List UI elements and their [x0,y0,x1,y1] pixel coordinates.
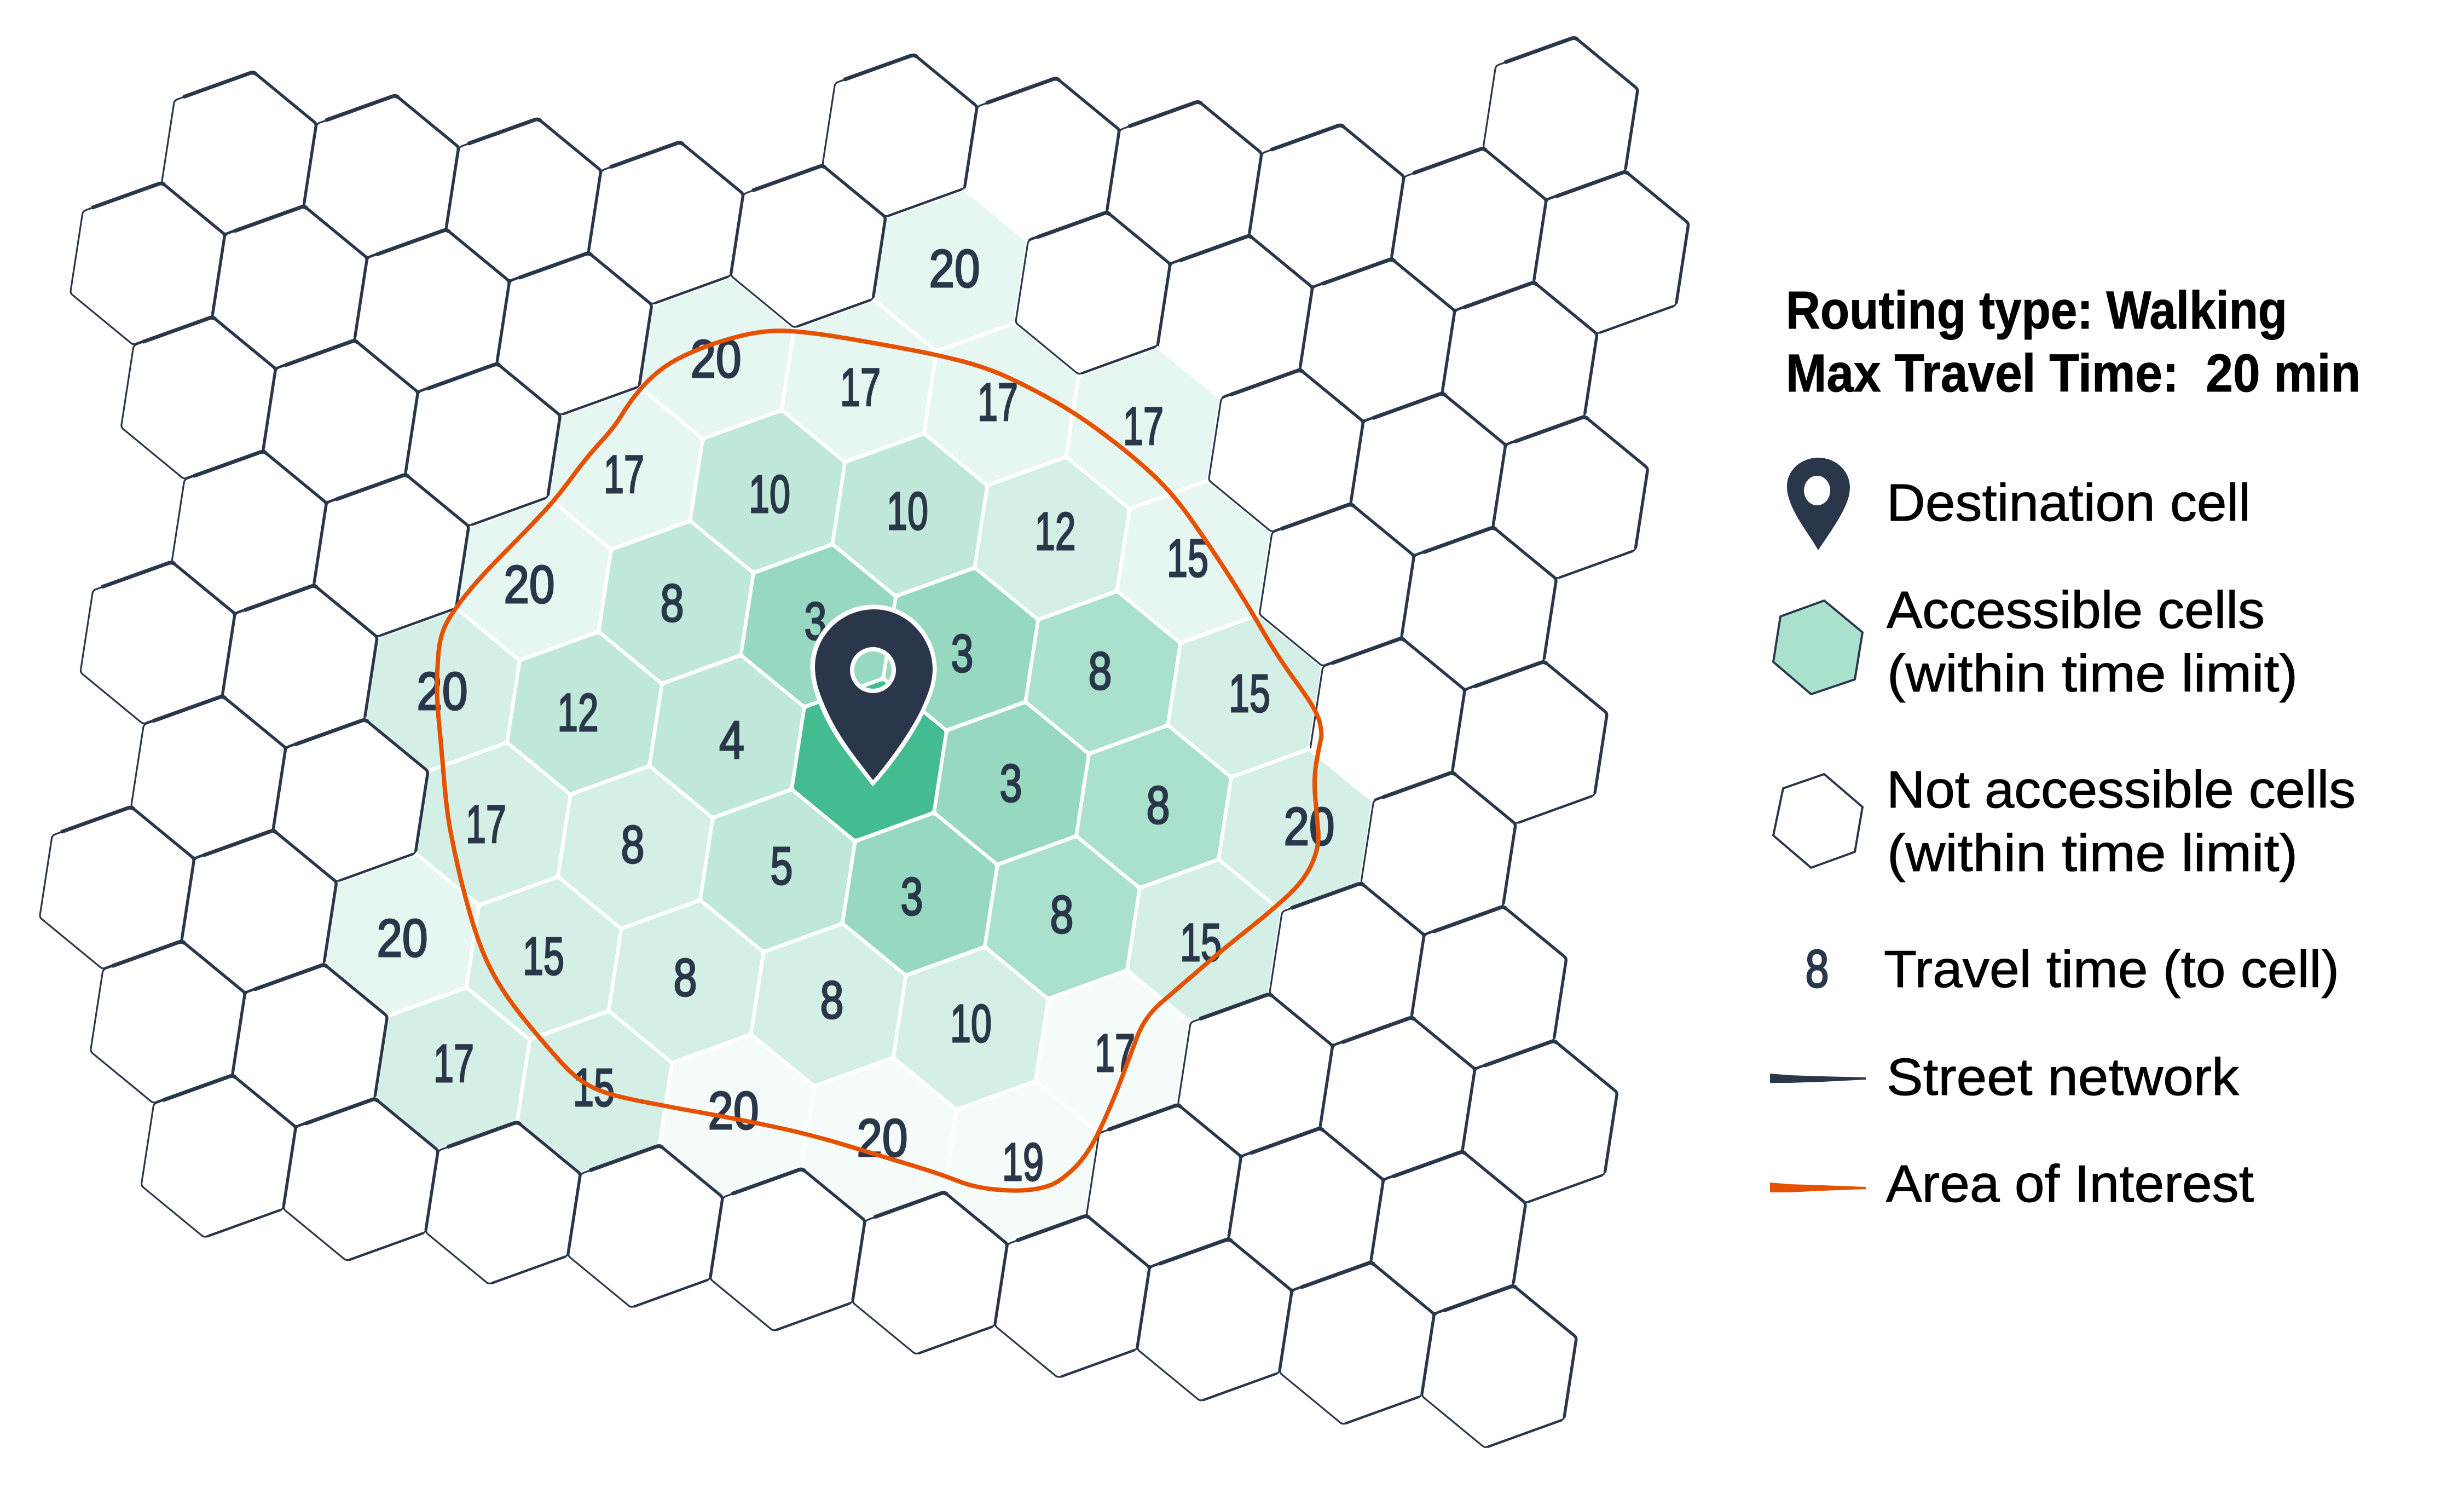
legend heading: max travel time: Max Travel Time: 20 min [1786,343,2361,403]
travel time numbers in cells: 17 [433,1034,474,1093]
travel time numbers in cells: 8 [673,948,697,1007]
travel time numbers in cells: 20 [504,555,555,614]
legend label: accessible cells: Accessible cells [1887,581,2265,639]
travel time numbers in cells: 3 [999,753,1022,813]
legend label: destination cell: Destination cell [1887,474,2251,532]
legend symbol: street network stroke [1770,1074,1866,1083]
outlined cells row 11 [142,1076,1576,1447]
icon: destination pin on map [813,608,934,782]
hex map: not accessible cells outlined [40,38,1688,1447]
travel time numbers in cells: 8 [820,970,844,1030]
travel time numbers in cells: 10 [749,464,790,524]
travel time numbers in cells: 3 [805,591,826,651]
travel time numbers in cells: 15 [1229,664,1270,723]
travel time numbers in cells: 20 [708,1081,759,1140]
travel time numbers in cells: 17 [1095,1023,1135,1083]
travel time numbers in cells: 20 [1284,797,1334,856]
accessible cells row 7 [325,855,1190,1132]
travel time numbers in cells: 17 [840,357,881,417]
legend label: accessible within time limit: (within time limit) [1887,644,2298,703]
masked cell edges where the outline fades out [965,189,1373,800]
travel time numbers in cells: 15 [1167,528,1208,588]
outlined cells row 6 [172,452,1607,823]
travel time numbers in cells: 8 [621,815,645,874]
outlined cells row 1 [1484,38,1638,199]
travel time numbers in cells: 4 [719,710,744,770]
travel time numbers in cells: 15 [573,1058,615,1117]
travel time numbers in cells: 17 [977,372,1018,432]
legend label: not accessible cells: Not accessible cells [1887,760,2356,819]
outlined cells row 7 [80,563,1516,934]
outlined cells row 3 [162,73,1597,444]
icon: legend accessible hexagon [1773,601,1863,694]
accessible cells row 8 [375,989,1098,1243]
travel time numbers in cells: 19 [1002,1132,1044,1192]
outlined cells row 2 [823,55,1688,333]
travel time numbers in cells: 10 [950,994,992,1053]
travel time numbers in cells: 17 [1123,396,1164,456]
legend label: not accessible within time limit: (within time limit) [1887,824,2298,883]
travel time numbers in cells: 20 [691,329,741,389]
travel time numbers in cells: 8 [660,573,684,633]
outlined cells row 5 [122,318,1556,689]
icon: legend not accessible hexagon [1773,774,1863,868]
travel time numbers in cells: 8 [1050,885,1074,944]
outlined cells row 8 [131,697,1566,1068]
travel time numbers in cells: 17 [604,445,644,504]
travel time numbers in cells: 20 [929,239,980,298]
accessible cells row 4 [457,499,1322,776]
legend label: area of interest: Area of Interest [1886,1155,2254,1213]
area of interest boundary [437,331,1321,1191]
legend heading: routing type: Routing type: Walking [1786,280,2287,340]
travel time numbers in cells: 20 [417,661,467,721]
travel time numbers in cells: 8 [1088,641,1112,701]
accessible cells row 6 [416,743,1281,1021]
accessible cells row 5 with destination cell [365,609,1373,910]
travel time numbers in cells: 15 [523,926,564,986]
travel time numbers in cells: 17 [466,794,506,854]
outlined cells row 9 [40,808,1617,1202]
outlined cells row 10 [91,942,1525,1313]
travel time numbers in cells: 15 [1180,913,1222,972]
accessible cells row 1 [874,189,1027,350]
travel time numbers in cells: 3 [901,867,923,926]
travel time numbers in cells: 8 [1146,775,1170,835]
travel time numbers in cells: 20 [857,1108,907,1168]
travel time numbers in cells: 12 [557,683,599,742]
icon: legend destination pin [1787,458,1850,550]
legend symbol: travel time number: 8 [1805,939,1829,999]
travel time numbers in cells: 5 [771,836,793,896]
legend label: travel time: Travel time (to cell) [1884,940,2339,999]
travel time numbers in cells [377,239,1334,1192]
travel time numbers in cells: 20 [377,908,428,968]
travel time numbers in cells: 3 [951,624,973,683]
accessible cells row 3 [548,388,1271,642]
accessible cells row 2 [640,277,1221,508]
outlined cells row 4 [71,183,1647,578]
legend label: street network: Street network [1887,1048,2240,1106]
legend symbol: area of interest stroke [1770,1183,1866,1192]
hex map: accessible cells coloured by travel time [325,189,1373,1243]
travel time numbers in cells: 12 [1034,501,1076,561]
travel time numbers in cells: 10 [887,481,928,541]
